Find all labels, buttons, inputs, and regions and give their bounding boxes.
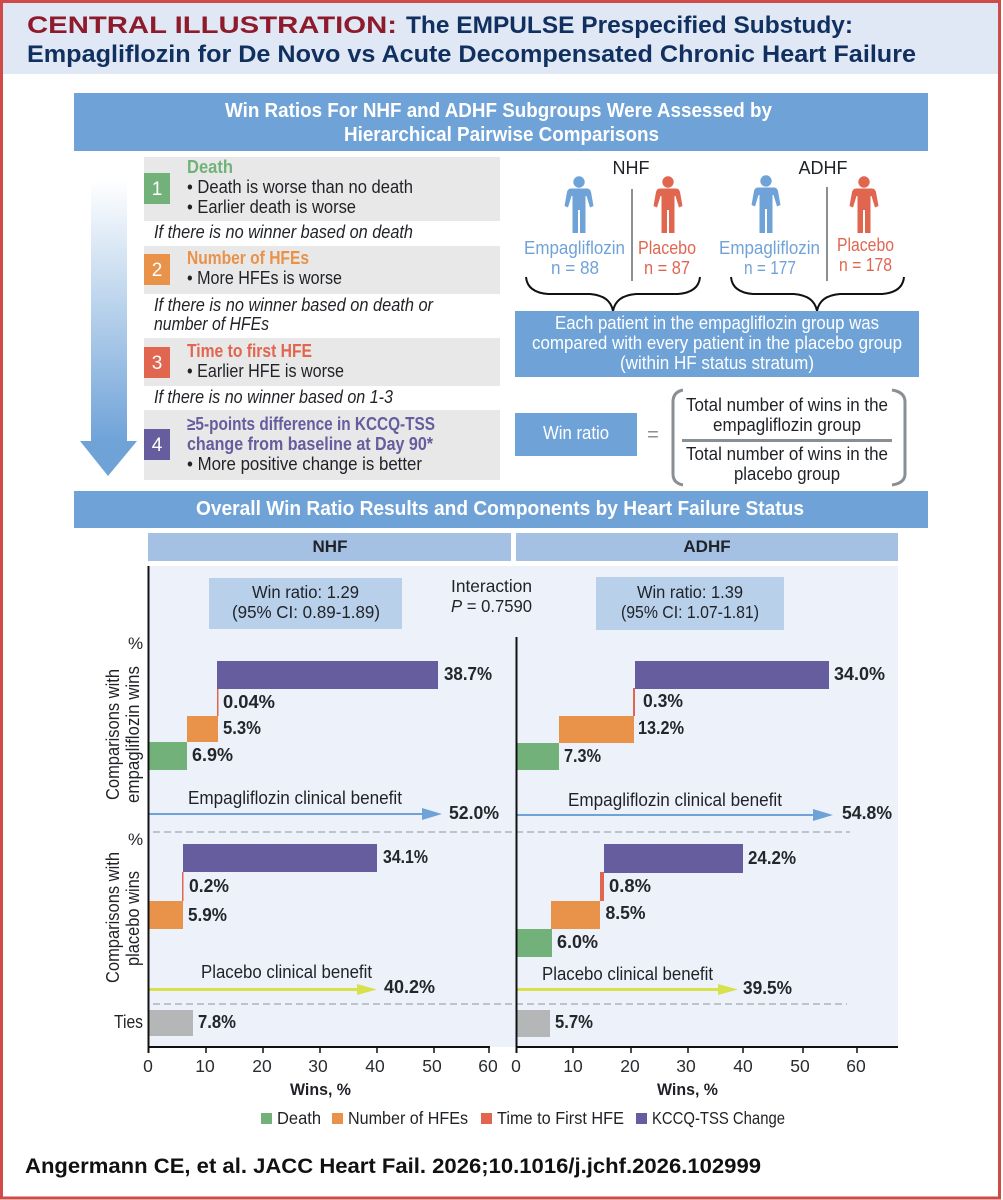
y axis label: empagliflozin wins [103,634,143,803]
step 4: KCCQ-TSS: ≥5-points difference in KCCQ-TSS [187,414,435,434]
title: Empagliflozin for De Novo vs Acute Decompensated Chronic Heart Failure [27,41,916,68]
legend: Death [277,1108,321,1128]
panel: ADHF patients: Placebo [837,234,894,255]
chart background [148,566,898,1047]
chart: ADHF ties: 5.7% [555,1012,593,1032]
chart: ADHF empagliflozin wins [517,661,885,770]
arrow: hierarchy direction [80,180,137,476]
win ratio formula: Win ratio [543,423,609,443]
arrow: NHF empagliflozin clinical benefit: 52.0% [449,803,499,823]
chart: ADHF placebo wins: 6.0% [557,932,598,952]
step 2: number of HFEs: 2 [152,260,162,281]
win ratio formula: = [647,424,659,446]
x axis: NHF: 50 [422,1056,442,1076]
callout: ADHF win ratio: Win ratio: 1.39 [637,582,743,602]
x axis: ADHF: 40 [733,1056,753,1076]
panel: NHF patients [524,158,700,311]
step 3: time to first HFE [144,338,500,386]
legend: Time to First HFE [497,1108,624,1128]
title: The EMPULSE Prespecified Substudy: [406,12,853,39]
y axis label: empagliflozin wins: % [128,634,143,653]
win ratio formula: Total number of wins in the [686,444,888,464]
arrow: ADHF empagliflozin clinical benefit [517,790,892,823]
arrow: ADHF placebo clinical benefit [517,964,792,998]
x axis: ADHF: 30 [676,1056,696,1076]
condition text 3: If there is no winner based on 1-3 [154,387,393,407]
icon: placebo patient NHF [654,176,682,233]
callout: ADHF win ratio: (95% CI: 1.07-1.81) [621,602,759,622]
win ratio formula [515,390,905,485]
y axis label: ties: Ties [114,1012,143,1032]
chart: ADHF empagliflozin wins: 34.0% [834,664,885,684]
subheader: ADHF: ADHF [683,537,731,556]
step 1: death: • Earlier death is worse [187,197,356,217]
chart: NHF empagliflozin wins: 0.04% [223,692,275,712]
step 3: time to first HFE: Time to first HFE [187,341,312,361]
chart: NHF empagliflozin wins: 5.3% [223,718,261,738]
chart: NHF placebo wins: 0.2% [189,876,229,896]
x axis: NHF: Wins, % [290,1080,351,1099]
arrow: NHF placebo clinical benefit: 40.2% [384,977,435,997]
callout: comparison description: (within HF status stratum) [620,353,814,373]
arrow: NHF empagliflozin clinical benefit: Empagliflozin clinical benefit [188,788,402,808]
citation: Angermann CE, et al. JACC Heart Fail. 2026;10.1016/j.jchf.2026.102999 [25,1155,761,1178]
x axis: NHF [143,566,498,1099]
heading band: overall results: Overall Win Ratio Results and Components by Heart Failure Status [196,498,804,520]
subheader: NHF [148,533,511,561]
heading band: overall results [74,491,928,528]
heading band: hierarchical pairwise comparisons: Hierarchical Pairwise Comparisons [344,123,659,146]
x axis: ADHF: 0 [511,1056,521,1076]
win ratio formula: placebo group [734,464,840,484]
x axis: ADHF: 20 [620,1056,640,1076]
icon: placebo patient ADHF [850,176,878,233]
interaction P value [451,576,532,616]
icon: empagliflozin patient ADHF [752,175,780,233]
arrow: ADHF placebo clinical benefit: 39.5% [743,978,792,998]
step 2: number of HFEs: Number of HFEs [187,248,309,268]
title [27,12,916,68]
step 1: death: Death [187,157,233,177]
step 1: death: 1 [152,179,162,200]
arrow: NHF placebo clinical benefit: Placebo clinical benefit [201,962,372,982]
interaction P value: Interaction [451,576,532,596]
condition text 2: If there is no winner based on death or [154,295,434,315]
panel: ADHF patients: ADHF [798,158,848,178]
panel: ADHF patients: Empagliflozin [719,237,820,258]
win ratio formula: Total number of wins in the [686,395,888,415]
arrow: ADHF empagliflozin clinical benefit: Empagliflozin clinical benefit [568,790,782,810]
x axis: NHF: 40 [365,1056,385,1076]
step 1: death [144,157,500,221]
panel: NHF patients: Empagliflozin [524,237,625,258]
panel: NHF patients: n = 88 [551,257,599,278]
x axis: ADHF: 60 [846,1056,866,1076]
title: CENTRAL ILLUSTRATION: [27,12,397,39]
callout: NHF win ratio: Win ratio: 1.29 [252,582,359,602]
heading band: hierarchical pairwise comparisons [74,93,928,151]
panel: hierarchy steps [144,157,500,480]
x axis: ADHF: Wins, % [657,1080,718,1099]
panel: NHF patients: Placebo [638,237,696,258]
step 2: number of HFEs: • More HFEs is worse [187,268,342,288]
chart: ADHF empagliflozin wins: 13.2% [638,718,684,738]
chart: NHF placebo wins: 34.1% [383,847,428,867]
legend [261,1108,785,1128]
chart: NHF ties [149,1010,236,1036]
heading band: hierarchical pairwise comparisons: Win Ratios For NHF and ADHF Subgroups Were Assessed by [225,99,773,122]
x axis: NHF: 0 [143,1056,153,1076]
callout: ADHF win ratio [596,577,784,630]
arrow: ADHF empagliflozin clinical benefit: 54.8% [842,803,892,823]
x axis: ADHF: 10 [563,1056,583,1076]
x axis: NHF: 30 [308,1056,328,1076]
step 1: death: • Death is worse than no death [187,177,413,197]
step 2: number of HFEs [144,246,500,294]
y axis label: placebo wins: placebo wins [123,871,143,966]
step 3: time to first HFE: 3 [152,353,162,374]
x axis: NHF: 10 [195,1056,215,1076]
chart: ADHF empagliflozin wins: 0.3% [643,691,683,711]
chart: NHF placebo wins [149,844,428,929]
chart: ADHF ties [517,1010,593,1037]
y axis label: empagliflozin wins: empagliflozin wins [123,666,143,803]
subheader: ADHF [516,533,898,561]
chart: ADHF placebo wins: 0.8% [609,876,651,896]
win ratio formula: empagliflozin group [713,415,861,435]
step 3: time to first HFE: • Earlier HFE is worse [187,361,344,381]
chart: ADHF placebo wins [517,844,796,957]
chart: ADHF placebo wins: 24.2% [748,848,796,868]
chart: NHF empagliflozin wins [149,661,492,770]
chart: NHF ties: 7.8% [198,1012,236,1032]
step 4: KCCQ-TSS: 4 [152,435,163,456]
step 4: KCCQ-TSS: • More positive change is better [187,454,422,474]
y axis label: placebo wins: Comparisons with [103,852,123,983]
condition text 2: number of HFEs [154,314,269,334]
callout: comparison description: compared with every patient in the placebo group [532,333,902,353]
panel: ADHF patients: n = 178 [839,254,892,275]
condition text 2 [154,295,434,334]
callout: NHF win ratio [209,578,402,629]
legend: Number of HFEs [348,1108,468,1128]
callout: comparison description [515,311,919,377]
x axis: NHF: 20 [252,1056,272,1076]
chart: NHF empagliflozin wins: 38.7% [444,664,492,684]
panel: ADHF patients [719,158,904,311]
arrow: NHF empagliflozin clinical benefit [149,788,499,823]
x axis: NHF: 60 [478,1056,498,1076]
chart: ADHF placebo wins: 8.5% [606,903,646,923]
x axis: ADHF [511,637,898,1099]
chart: ADHF empagliflozin wins: 7.3% [564,746,601,766]
callout: comparison description: Each patient in the empagliflozin group was [555,313,879,333]
panel: NHF patients: NHF [612,158,650,178]
subheader: NHF: NHF [313,537,347,556]
y axis label: empagliflozin wins: Comparisons with [103,669,123,800]
arrow: ADHF placebo clinical benefit: Placebo clinical benefit [542,964,713,984]
step 4: KCCQ-TSS: change from baseline at Day 90* [187,434,433,454]
interaction P value: P = 0.7590 [451,596,532,616]
panel: ADHF patients: n = 177 [744,257,796,278]
panel: NHF patients: n = 87 [644,257,690,278]
legend: KCCQ-TSS Change [652,1108,785,1128]
y axis label: placebo wins [103,830,143,983]
chart: NHF empagliflozin wins: 6.9% [192,745,233,765]
condition text 1: If there is no winner based on death [154,222,413,242]
y axis label: placebo wins: % [128,830,143,849]
step 4: KCCQ-TSS [144,410,500,480]
title band [3,3,999,74]
icon: empagliflozin patient NHF [564,176,594,233]
chart: NHF placebo wins: 5.9% [188,905,227,925]
arrow: NHF placebo clinical benefit [149,962,435,997]
x axis: ADHF: 50 [790,1056,810,1076]
callout: NHF win ratio: (95% CI: 0.89-1.89) [232,602,380,622]
